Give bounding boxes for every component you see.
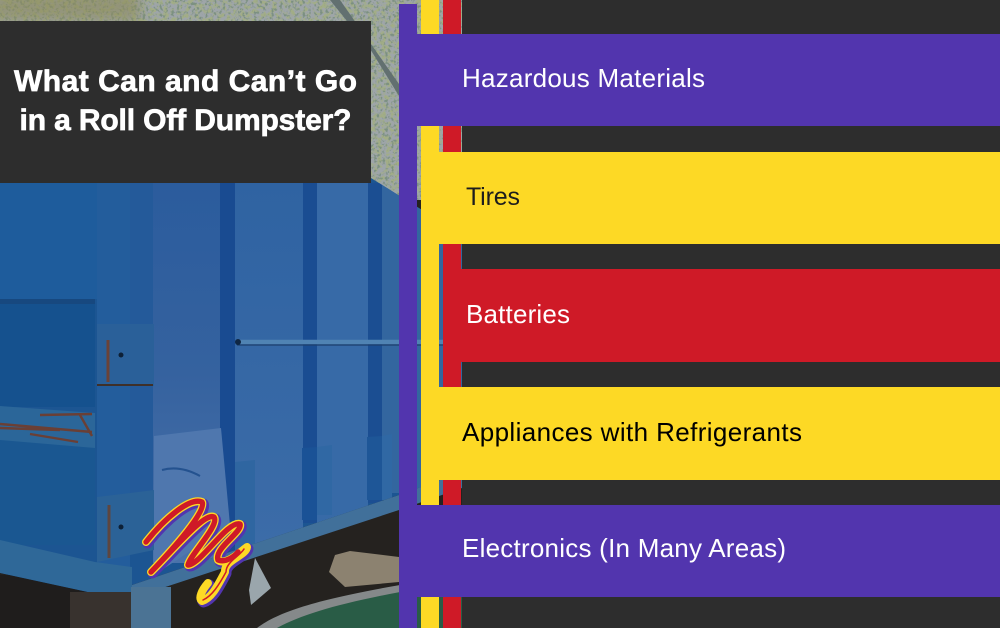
rock: [329, 551, 399, 587]
bar: Batteries: Batteries: [466, 299, 570, 329]
title box: [0, 21, 371, 183]
stripe: purple: [399, 4, 417, 628]
dumpster body: [0, 178, 462, 608]
front rail: [132, 472, 462, 598]
curb and grass: [257, 575, 462, 628]
bar: Electronics (In Many Areas): [399, 505, 1000, 597]
title: in a Roll Off Dumpster?: [20, 104, 352, 137]
bar: Hazardous Materials: Hazardous Materials: [462, 63, 705, 93]
bar: Tires: Tires: [466, 183, 520, 211]
bar: Tires: [421, 152, 1000, 244]
bar: Batteries: [443, 269, 1000, 362]
stripe: yellow: [421, 0, 439, 628]
flag: [249, 558, 271, 605]
logo: MJ script: [146, 501, 248, 602]
bar: Appliances with Refrigerants: [421, 387, 1000, 480]
stripe: red: [443, 0, 461, 628]
bar: Appliances with Refrigerants: Appliances with Refrigerants: [462, 417, 802, 447]
hinge plates: [153, 324, 154, 386]
title: What Can and Can’t Go: [14, 65, 357, 98]
bar: Electronics (In Many Areas): Electronics (In Many Areas): [462, 533, 786, 563]
bar: Hazardous Materials: [399, 34, 1000, 126]
dent panel: [154, 428, 230, 575]
bottom rail: [0, 540, 132, 592]
bar handle: [237, 340, 462, 344]
photo: blue roll off dumpster: [0, 0, 462, 628]
feet: [70, 592, 132, 628]
lower rib boxes: [235, 460, 255, 550]
rusty rail: [0, 406, 95, 448]
